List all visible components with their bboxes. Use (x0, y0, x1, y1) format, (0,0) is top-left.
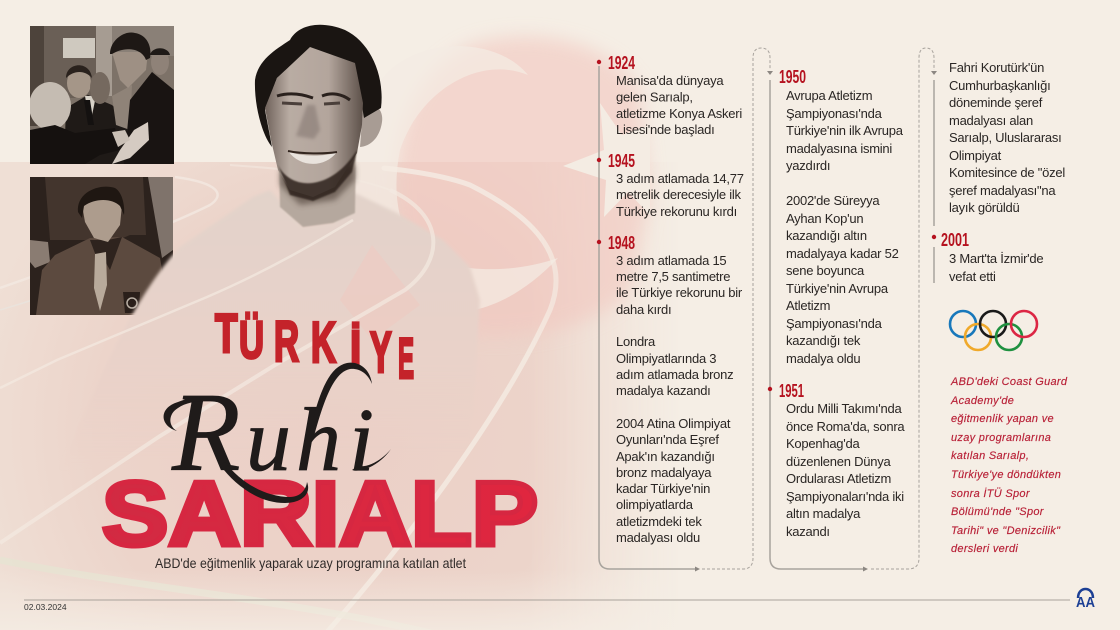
year headings: 1945 (608, 151, 635, 171)
body text: Manisa'da dünyaya (616, 73, 724, 88)
background: running track (0, 162, 680, 630)
body text: layık görüldü (949, 200, 1019, 215)
shirt lettering: T (215, 303, 238, 364)
body text: madalyasına ismini (786, 141, 892, 156)
body text: ile Türkiye rekorunu bir (616, 285, 743, 300)
subtitle: ABD'de eğitmenlik yaparak uzay programına katılan atlet (155, 555, 466, 571)
body text: daha kırdı (616, 302, 671, 317)
body text: 3 adım atlamada 15 (616, 253, 726, 268)
body text: kazandığı tek (786, 333, 861, 348)
body text: düzenlenen Dünya (786, 454, 891, 469)
body text: atletizme Konya Askeri (616, 106, 742, 121)
callout: red italic note: uzay programlarına (951, 432, 1051, 444)
body text: Cumhurbaşkanlığı (949, 78, 1050, 93)
body text: adım atlamada bronz (616, 367, 733, 382)
body text: Ordu Milli Takımı'nda (786, 401, 902, 416)
body text: sene boyunca (786, 263, 865, 278)
callout: red italic note: Academy'de (950, 395, 1014, 407)
marker 1948 (597, 240, 601, 244)
flag: crescent and star (351, 36, 650, 336)
body text: vefat etti (949, 269, 996, 284)
body text: atletizmdeki tek (616, 514, 702, 529)
body text: kazandı (786, 524, 830, 539)
year headings (608, 53, 635, 253)
body text: Şampiyonaları'nda iki (786, 489, 904, 504)
callout: red italic note: eğitmenlik yapan ve (951, 413, 1054, 425)
back man (151, 56, 169, 75)
body text: Kopenhag'da (786, 436, 860, 451)
marker 1951 (768, 387, 772, 391)
face (265, 47, 363, 197)
year headings: 1950 (779, 67, 806, 87)
title: SARIALP: SARIALP (102, 464, 538, 565)
body text: madalyası oldu (616, 530, 700, 545)
tall man (124, 72, 174, 164)
body text: Şampiyonası'nda (786, 316, 883, 331)
body text: Avrupa Atletizm (786, 88, 872, 103)
title: Ruhi: u (246, 391, 291, 490)
body text: metre 7,5 santimetre (616, 269, 730, 284)
photo: presentation of medal (29, 26, 174, 164)
callout: red italic note: dersleri verdi (951, 543, 1018, 555)
body text: Ordularası Atletizm (786, 471, 891, 486)
callout: red italic note: ABD'deki Coast Guard (950, 376, 1068, 388)
callout: red italic note: Türkiye'ye döndükten (951, 469, 1061, 481)
body text: Sarıalp, Uluslararası (949, 130, 1062, 145)
body text: 3 adım atlamada 14,77 (616, 171, 744, 186)
body text: Türkiye rekorunu kırdı (616, 204, 737, 219)
shirt lettering: K (311, 311, 336, 375)
timeline: column 1 (597, 53, 744, 545)
timeline: column 3 (932, 60, 1065, 284)
track lines over figure (0, 168, 556, 630)
date: 02.03.2024 (24, 602, 67, 612)
body text (616, 73, 744, 545)
track lines behind figure (0, 164, 278, 308)
shirt lettering: Ü (239, 309, 264, 370)
body text: Olimpiyat (949, 148, 1002, 163)
body text: gelen Sarıalp, (616, 90, 693, 104)
body text: döneminde şeref (949, 95, 1043, 110)
stubble (278, 150, 357, 201)
body text: 2002'de Süreyya (786, 193, 880, 208)
body text: bronz madalyaya (616, 465, 712, 480)
mouth (288, 151, 337, 164)
body text: 2004 Atina Olimpiyat (616, 416, 731, 431)
shirt lettering: R (274, 310, 299, 374)
middle men (64, 95, 128, 164)
body text: Ayhan Kop'un (786, 211, 863, 226)
body text: metrelik derecesiyle ilk (616, 187, 742, 202)
body text: Lisesi'nde başladı (616, 122, 714, 137)
body text: madalya kazandı (616, 383, 711, 398)
callout: red italic note (950, 376, 1068, 555)
body text: Komitesince de "özel (949, 165, 1065, 180)
nose (296, 105, 320, 139)
marker 1945 (597, 158, 601, 162)
body text: yazdırdı (786, 158, 830, 173)
marker 1924 (597, 60, 601, 64)
body text: Olimpiyatlarında 3 (616, 351, 716, 366)
year headings: 1951 (779, 381, 804, 401)
bottom paper fade (0, 570, 680, 630)
shirt lettering (215, 303, 414, 391)
year heading: 2001 (941, 230, 969, 250)
body text (949, 60, 1065, 284)
neck (279, 150, 356, 227)
title: Ruhi: i (349, 391, 374, 490)
body text: madalya oldu (786, 351, 860, 366)
year headings: 1948 (608, 233, 635, 253)
logo: AA: AA (1076, 594, 1095, 611)
ear (360, 104, 382, 147)
body text: Londra (616, 334, 656, 349)
callout: red italic note: Bölümü'nde "Spor (951, 506, 1045, 518)
shirt lettering: Y (370, 320, 392, 384)
body text: madalyaya kadar 52 (786, 246, 899, 261)
callout: red italic note: sonra İTÜ Spor (951, 488, 1031, 500)
shirt lettering: E (398, 327, 414, 391)
body text: Şampiyonası'nda (786, 106, 883, 121)
timeline: column 2 (768, 67, 905, 539)
title: Ruhi: h (296, 391, 341, 490)
footer rule (24, 600, 1070, 601)
body text: 3 Mart'ta İzmir'de (949, 251, 1043, 266)
portrait: Ruhi Sarıalp (60, 25, 480, 470)
body text: Oyunları'nda Eşref (616, 432, 719, 447)
body text: Atletizm (786, 298, 830, 313)
body text: madalyası alan (949, 113, 1033, 128)
callout: red italic note: katılan Sarıalp, (951, 450, 1029, 462)
body text: Türkiye'nin ilk Avrupa (786, 123, 904, 138)
body text: kazandığı altın (786, 228, 867, 243)
body text: önce Roma'da, sonra (786, 419, 905, 434)
body text: Türkiye'nin Avrupa (786, 281, 889, 296)
body text (786, 88, 905, 539)
title: Ruhi (164, 363, 391, 503)
shirt (60, 190, 480, 470)
body text: altın madalya (786, 506, 861, 521)
year headings (779, 67, 806, 401)
hands (112, 122, 149, 164)
marker 2001 (932, 235, 936, 239)
body text: şeref madalyası"na (949, 183, 1056, 198)
timeline connectors (599, 48, 937, 572)
brows and eyes (277, 94, 350, 100)
photo: seated portrait (30, 177, 173, 315)
year headings: 1924 (608, 53, 635, 73)
bald man (29, 82, 71, 130)
body text: Apak'ın kazandığı (616, 449, 715, 464)
callout: red italic note: Tarihi" ve "Denizcilik" (951, 525, 1061, 537)
body text: olimpiyatlarda (616, 497, 694, 512)
icon: olympic rings (950, 311, 1037, 350)
title: Ruhi: R (171, 371, 240, 495)
body text: kadar Türkiye'nin (616, 481, 710, 496)
shirt lettering: İ (350, 322, 361, 375)
hair (255, 25, 382, 147)
body text: Fahri Korutürk'ün (949, 60, 1044, 75)
